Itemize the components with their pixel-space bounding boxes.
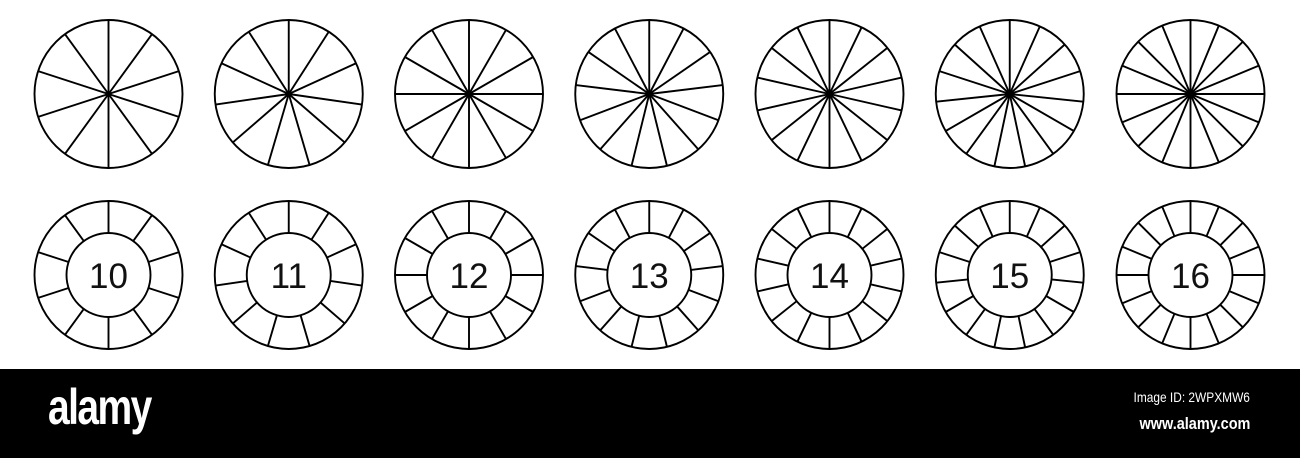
ring numbers: 11 [271,257,307,296]
pie 10 [34,20,182,168]
logo: alamy: alamy [48,379,151,435]
ring numbers: 15 [990,257,1029,296]
ring 12 [395,201,543,349]
pie 11 [215,20,363,168]
ring numbers: 12 [450,257,488,296]
ring numbers: 16 [1171,257,1210,296]
ring 11 [215,201,363,349]
pie 15 [936,20,1084,168]
pie 12 [395,20,543,168]
footer band [0,369,1300,458]
ring 14 [756,201,904,349]
pie 16 [1116,20,1264,168]
pie 14 [756,20,904,168]
ring 16 [1116,201,1264,349]
website: www.alamy.com [1139,414,1250,433]
ring 15 [936,201,1084,349]
ring numbers: 10 [89,257,128,296]
ring 10 [34,201,182,349]
ring numbers [89,257,1210,296]
ring numbers: 13 [630,257,669,296]
ring 13 [575,201,723,349]
pie 13 [575,20,723,168]
image id: Image ID: 2WPXMW6 [1134,389,1250,405]
ring numbers: 14 [810,257,849,296]
